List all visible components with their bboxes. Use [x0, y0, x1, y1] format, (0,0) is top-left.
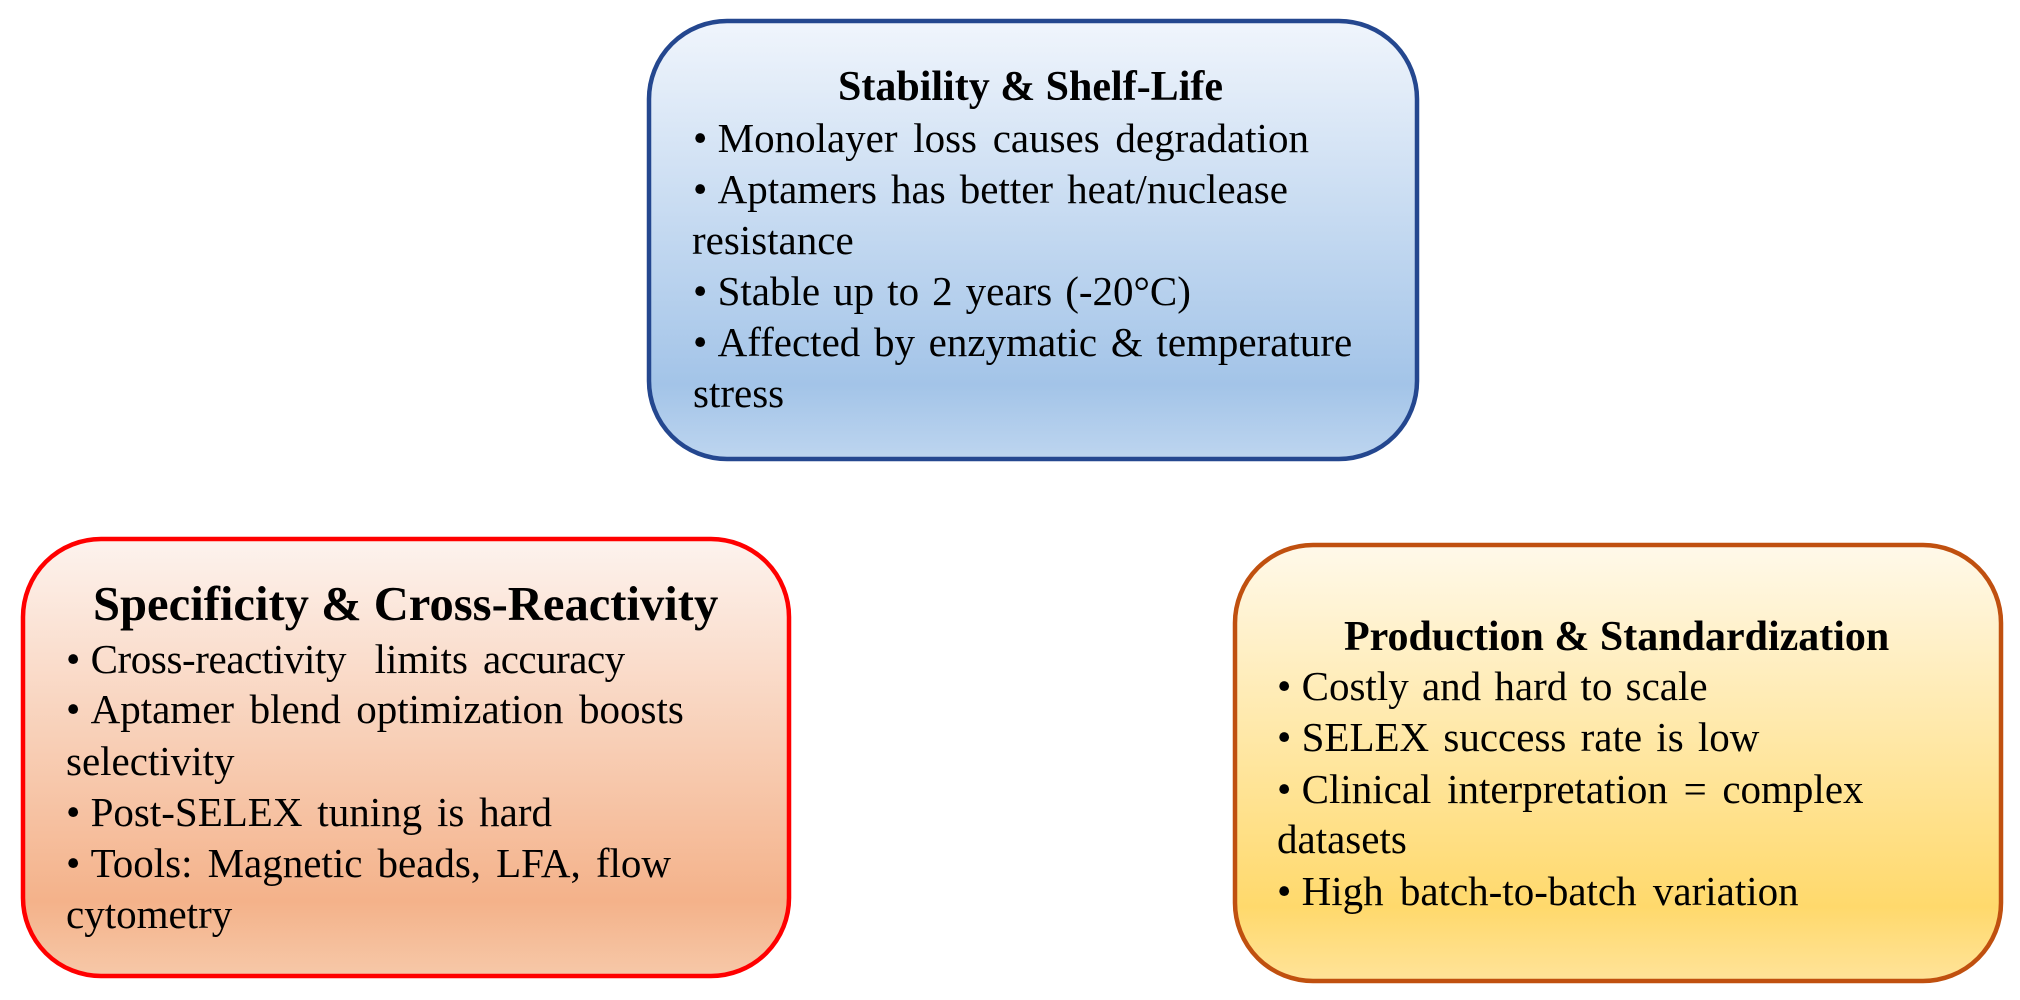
text block: specificity bullets: • Tools: Magnetic beads, LFA, flow — [66, 840, 671, 886]
text block: specificity bullets — [66, 636, 684, 937]
text block: stability bullets: stress — [693, 370, 784, 416]
heading: Specificity & Cross-Reactivity: Specificity & Cross-Reactivity — [93, 577, 718, 631]
text block: specificity bullets: limits — [375, 636, 468, 682]
panel: Stability & Shelf-Life — [649, 21, 1417, 459]
text block: specificity bullets: • Post-SELEX tuning is hard — [66, 789, 552, 835]
text block: specificity bullets: • Aptamer blend optimization boosts — [66, 686, 684, 732]
text block: specificity bullets: • Cross-reactivity — [66, 636, 346, 682]
text block: production bullets: • High batch-to-batch variation — [1277, 868, 1799, 914]
text block: production bullets: • Costly and hard to scale — [1277, 663, 1708, 709]
text block: stability bullets: • Aptamers has better heat/nuclease — [693, 166, 1288, 212]
heading: Stability & Shelf-Life: Stability & Shelf-Life — [838, 64, 1223, 110]
text block: stability bullets — [692, 115, 1352, 416]
text block: production bullets: • Clinical interpretation = complex — [1277, 766, 1864, 812]
panel background: blue rounded box — [649, 21, 1417, 459]
panel background: yellow rounded box — [1235, 545, 2001, 981]
text block: stability bullets: • Monolayer loss causes degradation — [693, 115, 1309, 161]
text block: stability bullets: resistance — [692, 217, 854, 263]
text block: production bullets — [1277, 663, 1864, 914]
text block: specificity bullets: selectivity — [66, 738, 235, 784]
text block: production bullets: datasets — [1277, 816, 1407, 862]
panel: Production & Standardization — [1235, 545, 2001, 981]
panel background: red rounded box — [23, 539, 789, 976]
text block: stability bullets: • Stable up to 2 years (-20°C) — [693, 268, 1191, 314]
panel: Specificity & Cross-Reactivity — [23, 539, 789, 976]
text block: specificity bullets: accuracy — [483, 636, 626, 682]
heading: Production & Standardization: Production & Standardization — [1344, 614, 1889, 660]
text block: production bullets: • SELEX success rate is low — [1277, 714, 1760, 760]
text block: stability bullets: • Affected by enzymatic & temperature — [693, 319, 1352, 365]
text block: specificity bullets: cytometry — [66, 891, 233, 937]
